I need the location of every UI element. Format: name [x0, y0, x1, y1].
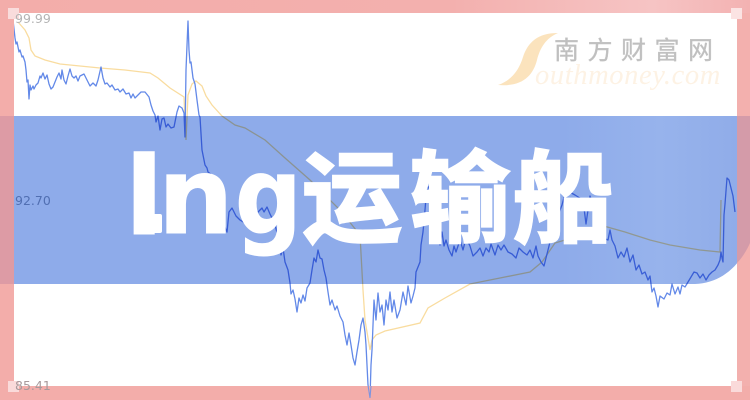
watermark Chinese name: 南方财富网	[554, 31, 722, 67]
title: g	[235, 134, 302, 258]
axis label: mid: 92.70	[15, 193, 51, 208]
axis label: high: 99.99	[15, 11, 51, 26]
price line tail over frame	[368, 385, 371, 398]
icon: orange swoosh S	[498, 33, 558, 85]
line chart: moving average	[18, 22, 721, 350]
title: 输	[410, 118, 510, 263]
axis label: low: 85.41	[15, 378, 51, 393]
blue banner	[0, 116, 750, 284]
title: 运	[302, 118, 402, 263]
watermark: southmoney logo	[498, 31, 722, 91]
watermark domain: outhmoney.com	[535, 60, 721, 91]
title: 船	[513, 118, 613, 263]
title: l	[126, 135, 162, 258]
title: n	[158, 135, 233, 258]
title	[126, 118, 613, 263]
